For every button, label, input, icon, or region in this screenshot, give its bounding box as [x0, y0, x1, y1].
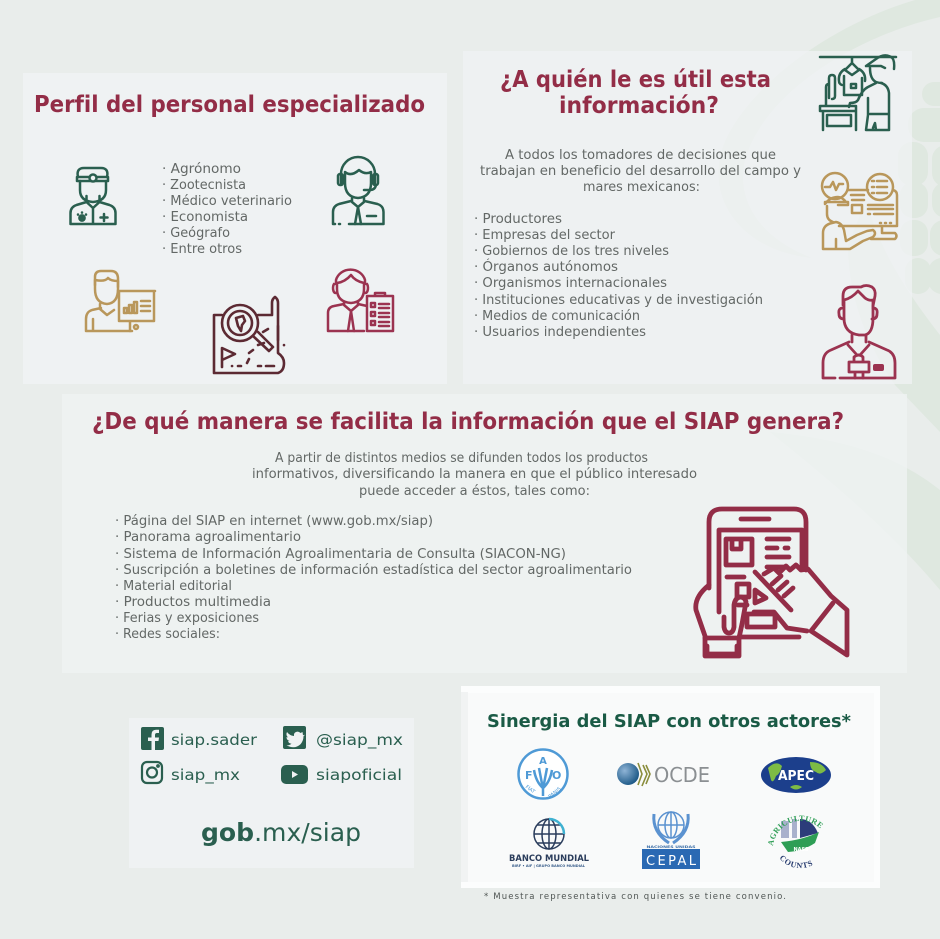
icon: employee with clipboard	[328, 270, 393, 331]
logo: Agriculture Counts	[768, 816, 824, 868]
list: medios: · Página del SIAP en internet (www.gob.mx/siap)	[115, 514, 433, 529]
list: profesiones: · Entre otros	[162, 242, 242, 257]
icon: facebook	[141, 727, 164, 750]
text: intro de qué manera: A partir de distintos medios se difunden todos los productos	[275, 451, 648, 466]
logo: Agriculture Counts: NASS	[793, 847, 809, 853]
logo: FAO: O	[552, 769, 561, 782]
list: usuarios: · Empresas del sector	[474, 228, 616, 243]
heading: de qué manera: ¿De qué manera se facilita la información que el SIAP genera?	[92, 409, 844, 435]
list: usuarios: · Productores	[474, 212, 562, 227]
list: medios: · Productos multimedia	[115, 595, 271, 610]
icon: hands on tablet	[696, 509, 847, 656]
text: intro de qué manera: puede acceder a éstos, tales como:	[359, 484, 590, 499]
logo: Agriculture Counts: COUNTS	[780, 856, 812, 868]
list: profesiones: · Agrónomo	[162, 162, 241, 177]
text: intro a quién: trabajan en beneficio del desarrollo del campo y	[480, 164, 801, 179]
list: medios: · Material editorial	[115, 579, 232, 594]
text: intro a quién: mares mexicanos:	[583, 180, 700, 195]
icon: map with magnifier	[214, 297, 284, 373]
text: siapoficial: siapoficial	[316, 766, 402, 784]
logo: Banco Mundial: BANCO MUNDIAL	[509, 854, 589, 864]
icon: production worker	[820, 55, 896, 130]
logo: FAO: F	[525, 769, 533, 782]
list: profesiones: · Geógrafo	[162, 226, 230, 241]
logo: APEC	[761, 757, 831, 793]
logo: OCDE	[617, 763, 710, 787]
logo: Banco Mundial	[509, 819, 589, 868]
logo: OCDE: OCDE	[654, 763, 710, 787]
list: medios: · Ferias y exposiciones	[115, 611, 259, 626]
heading: a quién: información?	[559, 93, 719, 119]
text: intro a quién	[480, 148, 801, 195]
list: profesiones: · Economista	[162, 210, 248, 225]
icon: operator with headset	[333, 157, 384, 224]
text: intro de qué manera	[252, 451, 697, 499]
logo: Banco Mundial: BIRF • AIF | GRUPO BANCO MUNDIAL	[512, 863, 586, 868]
list: profesiones: · Zootecnista	[162, 178, 246, 193]
icon: instagram	[142, 762, 162, 783]
text: @siap_mx: @siap_mx	[316, 731, 403, 750]
list: usuarios: · Organismos internacionales	[474, 276, 667, 291]
list: medios: · Redes sociales:	[115, 627, 220, 642]
panel: perfil del personal especializado	[23, 73, 447, 384]
logo: FAO: A	[539, 756, 547, 767]
logo: CEPAL	[642, 812, 700, 869]
logo: FAO	[518, 750, 568, 800]
text: siap.sader: siap.sader	[171, 731, 258, 749]
panel: de qué manera	[62, 394, 907, 673]
heading: a quién: ¿A quién le es útil esta	[500, 67, 771, 93]
list: usuarios	[474, 212, 763, 340]
list: usuarios: · Gobiernos de los tres niveles	[474, 244, 669, 259]
list: profesiones: · Médico veterinario	[162, 194, 292, 209]
background swoosh and grain motif	[718, 0, 940, 590]
list: medios: · Panorama agroalimentario	[115, 530, 301, 545]
logo: Agriculture Counts: AGRICULTURE	[768, 816, 824, 846]
icon: veterinarian	[70, 168, 116, 224]
icon: analyst with chart board	[86, 271, 155, 331]
text: intro de qué manera: informativos, diversificando la manera en que el público interesado	[252, 467, 697, 482]
list: medios: · Sistema de Información Agroalimentaria de Consulta (SIACON-NG)	[115, 547, 566, 562]
text: gob.mx/siap: gob.mx/siap	[201, 818, 361, 847]
panel: a quién le es útil	[463, 51, 912, 384]
panel: redes sociales	[129, 718, 414, 868]
icon: analyst at dashboard	[822, 173, 897, 249]
icon: youtube	[281, 765, 308, 784]
text: intro a quién: A todos los tomadores de decisiones que	[505, 148, 776, 163]
list: usuarios: · Instituciones educativas y de investigación	[474, 293, 763, 308]
list: usuarios: · Usuarios independientes	[474, 325, 646, 340]
heading: sinergia: Sinergia del SIAP con otros actores*	[487, 711, 852, 732]
text: siap_mx: siap_mx	[171, 766, 240, 785]
list: usuarios: · Órganos autónomos	[474, 259, 618, 275]
list: medios	[115, 514, 632, 642]
footnote: * Muestra representativa con quienes se tiene convenio.	[484, 892, 786, 902]
logo: CEPAL: NACIONES UNIDAS	[646, 845, 696, 849]
logo: APEC: APEC	[778, 769, 814, 784]
list: profesiones	[162, 162, 292, 257]
logo: CEPAL: CEPAL	[646, 854, 697, 869]
heading: perfil: Perfil del personal especializado	[34, 92, 425, 118]
list: usuarios: · Medios de comunicación	[474, 309, 640, 324]
panel: sinergia	[461, 686, 880, 888]
logo: FAO: PANIS	[548, 786, 563, 800]
logo: FAO: FIAT	[524, 784, 537, 796]
list: medios: · Suscripción a boletines de información estadística del sector agroalimentario	[115, 563, 632, 578]
icon: twitter	[283, 726, 306, 749]
heading: a quién	[500, 67, 771, 119]
icon: man with ID badge	[823, 286, 895, 378]
